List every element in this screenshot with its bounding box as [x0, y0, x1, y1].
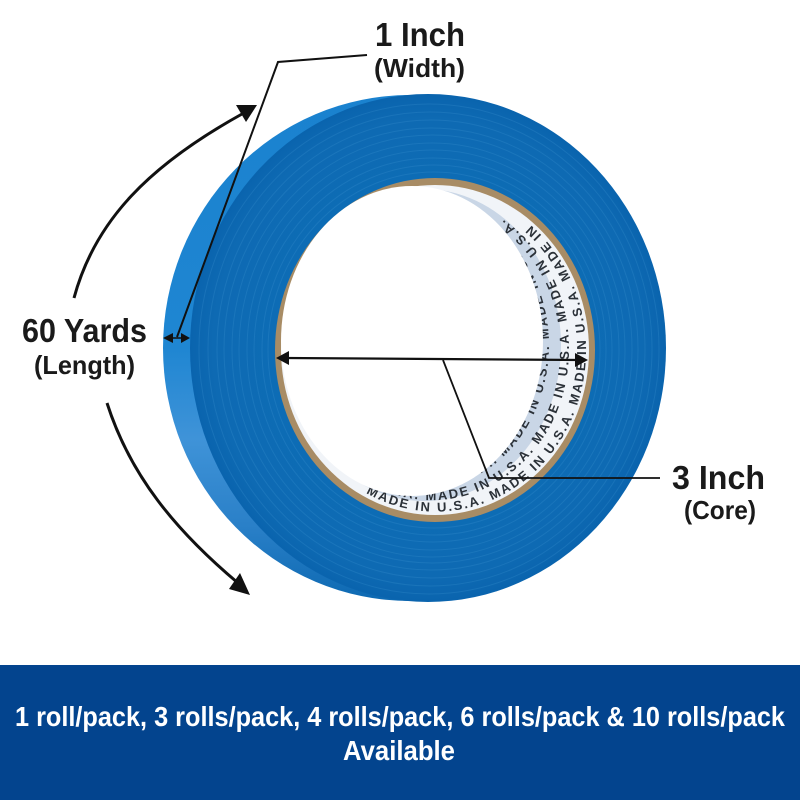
- inner liner shading: [287, 189, 561, 501]
- label: length: (Length): [34, 350, 135, 380]
- label: core: [672, 459, 765, 525]
- tape roll: [163, 94, 666, 602]
- cardboard core: [275, 178, 595, 522]
- leader: width: [177, 55, 367, 337]
- printed liner text: MADE IN U.S.A. MADE IN U.S.A. MADE IN U.S.A. MADE IN: [366, 226, 586, 512]
- label: length: 60 Yards: [22, 312, 147, 349]
- label: width: (Width): [374, 53, 465, 83]
- tape front face: [190, 94, 666, 602]
- center opening: [281, 186, 543, 496]
- arrow: width dimension: [163, 333, 190, 343]
- label: length: [22, 312, 147, 380]
- leader: core: [443, 360, 660, 478]
- label: width: 1 Inch: [375, 16, 465, 53]
- label: width: [374, 16, 465, 83]
- banner: [0, 665, 800, 800]
- printed liner text: MADE IN U.S.A. MADE IN U.S.A. MADE IN U.S.A.: [476, 256, 550, 476]
- printed liner text: U.S.A. MADE IN U.S.A. MADE IN U.S.A. MADE IN U.S.A.: [398, 220, 569, 500]
- tape side edge: [163, 95, 657, 601]
- arrow: core diameter: [276, 351, 588, 367]
- label: core: (Core): [684, 495, 756, 525]
- arrow: length upper arc: [74, 105, 257, 298]
- label: core: 3 Inch: [672, 459, 765, 496]
- inner liner: [281, 185, 589, 515]
- tape wrap streaks: [199, 104, 659, 594]
- banner text: Available: [343, 735, 455, 766]
- banner text: [15, 701, 785, 766]
- arrow: length lower arc: [107, 403, 250, 595]
